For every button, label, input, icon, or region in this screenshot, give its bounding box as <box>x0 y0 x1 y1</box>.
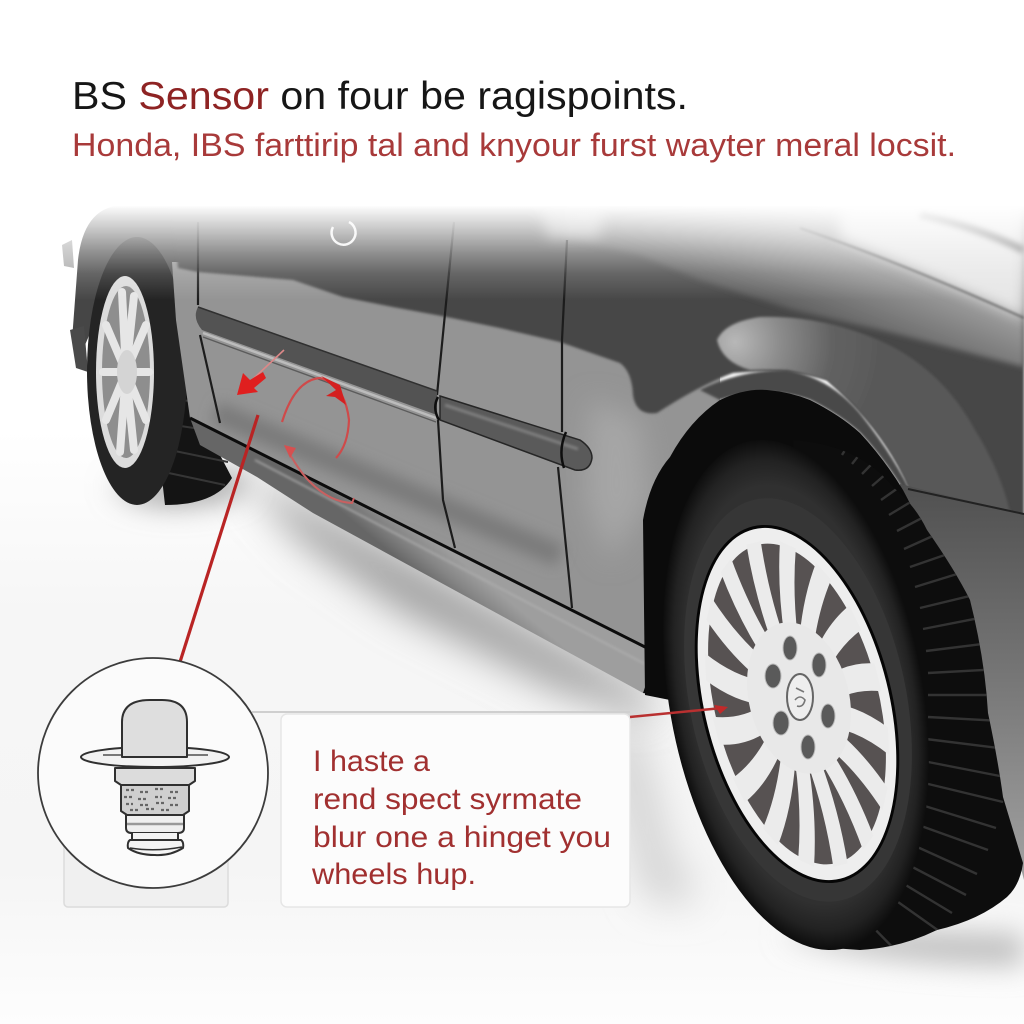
side trim strips <box>196 307 592 470</box>
sill end blob <box>643 640 672 697</box>
panel right of tyre <box>900 484 1024 880</box>
callout text: I haste a <box>313 745 430 778</box>
fender arch lip <box>700 370 910 490</box>
rear tyre tread <box>135 238 232 505</box>
sensor knurled body <box>121 785 189 815</box>
door crease shadow <box>215 412 560 556</box>
subtitle: Honda, IBS farttirip tal and knyour furst wayter meral locsit. <box>72 127 956 163</box>
icon: sensor <box>81 700 229 855</box>
light lower body base <box>172 262 720 670</box>
spokes <box>674 522 920 886</box>
mirror glint <box>332 222 356 245</box>
panel connector line <box>252 711 630 713</box>
rim <box>661 503 933 905</box>
top fade over car <box>0 205 1024 300</box>
hub <box>732 611 866 785</box>
tread grooves <box>841 450 1004 946</box>
fender highlight <box>717 317 1010 512</box>
dark shoulder <box>170 200 1024 520</box>
sensor collar <box>115 768 195 785</box>
bonnet surface <box>565 200 1024 367</box>
red arrow on door <box>237 350 284 395</box>
door shut lines <box>198 222 572 608</box>
callout text: wheels hup. <box>311 858 476 891</box>
front tyre sidewall <box>626 419 966 971</box>
sensor cap <box>122 700 187 757</box>
sensor callout circle <box>38 658 268 888</box>
front wheel <box>666 446 1023 950</box>
rear wheel <box>62 205 232 505</box>
rear tyre <box>87 237 187 505</box>
wing mirror ghost <box>540 205 603 238</box>
hub logo <box>787 674 813 720</box>
callout box <box>281 714 630 907</box>
lug holes <box>765 636 835 759</box>
rear rim <box>96 276 154 468</box>
sensor flange <box>81 747 229 767</box>
bonnet top streak <box>920 214 1024 250</box>
ground shadow <box>110 470 1024 965</box>
front tyre tread <box>793 440 1023 950</box>
red callout line to sensor <box>180 415 258 662</box>
sensor base <box>126 815 184 833</box>
callout text: rend spect syrmate <box>313 783 582 816</box>
sensor foot <box>128 840 183 855</box>
red pointer to wheel <box>630 705 728 717</box>
lower left backing card <box>64 840 228 907</box>
callout text <box>311 745 611 891</box>
red curved arrows <box>282 376 354 503</box>
side sill <box>190 418 650 693</box>
front wheel arch <box>643 390 985 900</box>
bonnet top bright area <box>840 190 1024 318</box>
bonnet crease <box>800 228 1024 318</box>
callout text: blur one a hinget you <box>313 821 611 854</box>
rear fender and bumper <box>72 205 216 424</box>
car body <box>170 190 1024 880</box>
fender light patch <box>585 400 650 560</box>
title: BS Sensor on four be ragispoints. <box>72 75 688 118</box>
